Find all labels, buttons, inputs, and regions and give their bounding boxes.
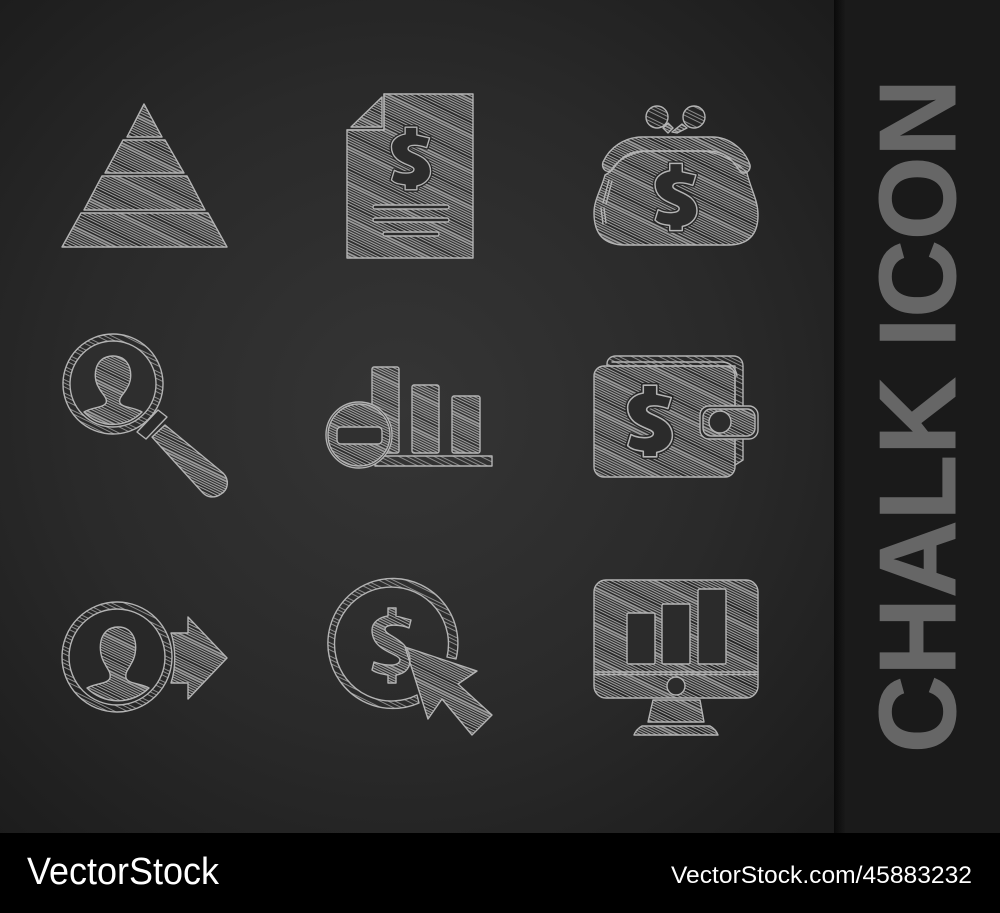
collar bbox=[137, 410, 167, 439]
dollar sign bbox=[628, 385, 672, 457]
baseline bbox=[375, 456, 492, 466]
icon: wallet bbox=[594, 356, 758, 477]
screen bbox=[594, 580, 758, 698]
handle bbox=[152, 425, 227, 497]
base bbox=[634, 726, 718, 735]
purse body bbox=[594, 151, 758, 245]
person bbox=[84, 356, 142, 424]
coin ring bbox=[328, 578, 458, 708]
clasp beads bbox=[646, 106, 705, 133]
footer brand: VectorStock bbox=[27, 851, 220, 893]
back flap bbox=[607, 356, 743, 465]
dollar sign bbox=[391, 127, 431, 190]
icon: magnifier with person bbox=[63, 334, 227, 497]
footer bar bbox=[0, 833, 1000, 913]
bars bbox=[372, 367, 480, 453]
lens ring bbox=[63, 334, 163, 434]
icon: monitor with bar chart bbox=[594, 580, 758, 735]
purse frame bbox=[603, 137, 750, 173]
text lines bbox=[373, 205, 449, 236]
stand bbox=[648, 700, 704, 722]
arrow bbox=[171, 617, 227, 699]
icon: bar chart with minus bbox=[326, 367, 492, 468]
person bbox=[87, 627, 149, 701]
power button bbox=[667, 677, 685, 695]
cursor arrow bbox=[405, 647, 492, 735]
icon: person with arrow bbox=[62, 602, 227, 712]
icon: pyramid bbox=[62, 104, 227, 247]
icon: dollar coin with cursor bbox=[328, 578, 492, 735]
title: CHALK ICON: CHALK ICON bbox=[857, 79, 979, 753]
chart bars bbox=[627, 589, 726, 664]
minus badge bbox=[326, 402, 392, 468]
dollar sign bbox=[655, 163, 697, 231]
footer image id: VectorStock.com/45883232 bbox=[671, 862, 972, 889]
icon: financial document bbox=[347, 94, 473, 258]
icon: coin purse bbox=[594, 106, 758, 245]
clasp bbox=[700, 406, 758, 439]
main chalkboard panel bbox=[0, 0, 834, 833]
thin dollar sign bbox=[372, 608, 411, 683]
right title strip bbox=[834, 0, 1000, 833]
ring bbox=[62, 602, 172, 712]
front panel bbox=[594, 366, 735, 477]
